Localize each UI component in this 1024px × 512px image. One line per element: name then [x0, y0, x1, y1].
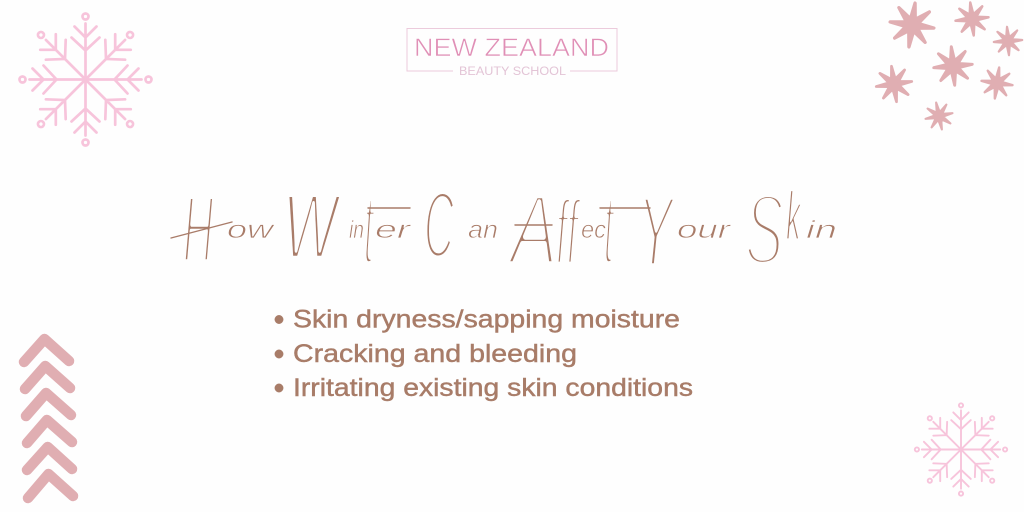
icon: stacked upward chevrons bottom left — [24, 339, 73, 498]
title: W — [283, 176, 342, 278]
title: our — [677, 216, 732, 244]
title: A — [506, 174, 558, 286]
title flourishes — [171, 208, 650, 238]
bullet list — [275, 306, 693, 402]
icon: cluster of pink stars top right — [874, 0, 1023, 132]
logo: New Zealand Beauty School — [407, 28, 617, 78]
title: ff — [556, 181, 581, 284]
logo: New Zealand Beauty School: NEW ZEALAND — [414, 34, 609, 62]
title — [183, 172, 837, 287]
title: H — [183, 175, 214, 283]
title: Y — [638, 176, 676, 287]
title: t — [604, 172, 615, 284]
bullet 3: Irritating existing skin conditions — [293, 374, 693, 402]
bullet 1: Skin dryness/sapping moisture — [293, 306, 680, 334]
title: k — [786, 177, 802, 256]
title: C — [424, 173, 454, 278]
title: ec — [581, 216, 606, 244]
logo: New Zealand Beauty School: BEAUTY SCHOOL — [459, 66, 567, 78]
title: er — [375, 216, 413, 244]
title: in — [806, 216, 837, 244]
title: S — [745, 175, 784, 286]
title: t — [364, 172, 375, 284]
bullet 2: Cracking and bleeding — [293, 340, 577, 368]
title: an — [468, 216, 498, 244]
title: in — [349, 216, 364, 244]
icon: large snowflake top left — [20, 14, 152, 146]
title: ow — [227, 216, 276, 244]
icon: small snowflake bottom right — [915, 403, 1007, 496]
